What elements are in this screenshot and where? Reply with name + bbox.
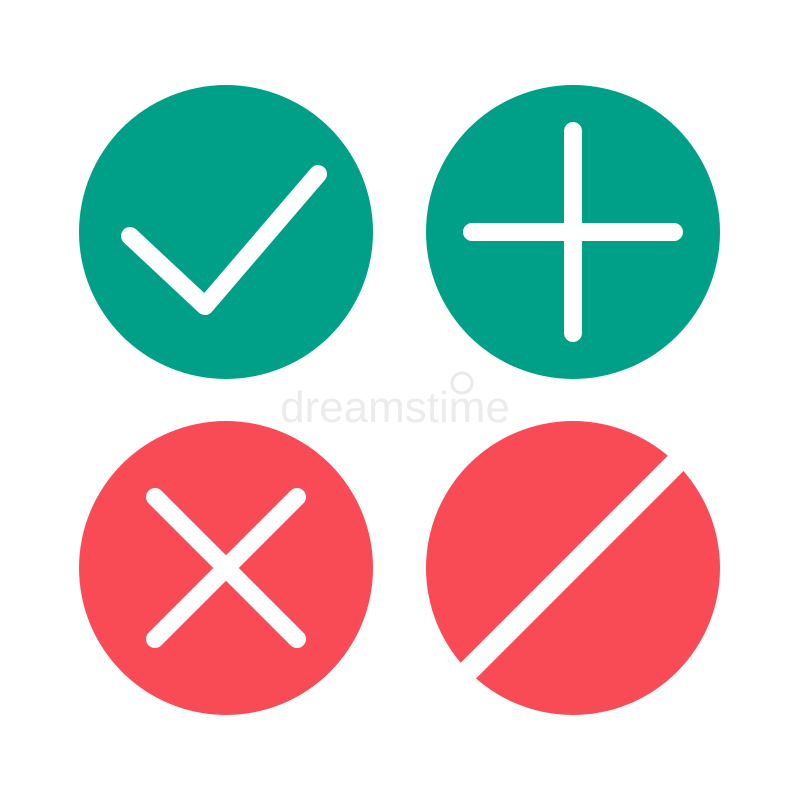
watermark text: dreamstime bbox=[280, 383, 510, 432]
icon: red cross bbox=[79, 421, 373, 715]
icon: red prohibited slash bbox=[420, 413, 726, 719]
icon: green check bbox=[79, 85, 373, 379]
icon: green plus bbox=[426, 85, 720, 379]
